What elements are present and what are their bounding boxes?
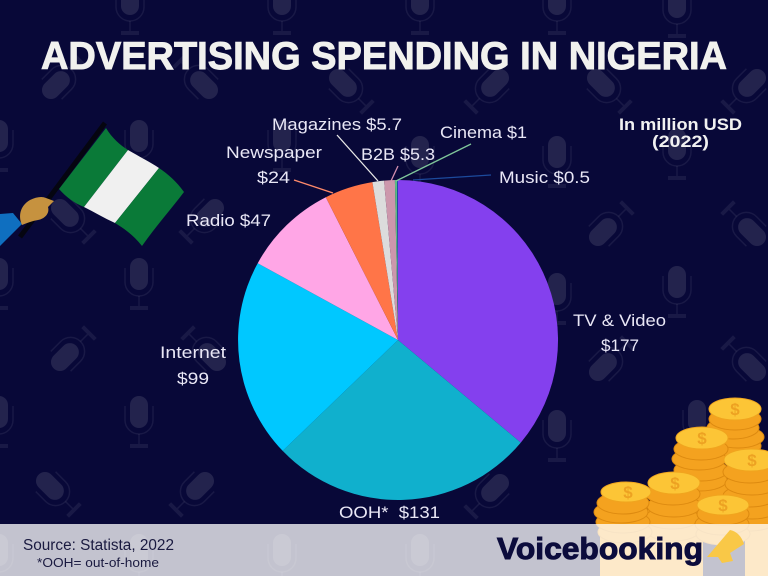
slice: OOH bbox=[283, 340, 521, 500]
logo: Voicebooking: Voicebooking bbox=[497, 531, 703, 566]
unit note: (2022) bbox=[652, 133, 709, 151]
pie labels: Cinema $1 bbox=[440, 123, 527, 142]
pie labels: Newspaper bbox=[226, 143, 322, 162]
title: ADVERTISING SPENDING IN NIGERIA bbox=[41, 35, 727, 78]
footer bar bbox=[0, 524, 768, 576]
unit note bbox=[619, 116, 742, 151]
pie labels: Music $0.5 bbox=[499, 168, 590, 187]
unit note: In million USD bbox=[619, 116, 742, 134]
slice: B2B bbox=[384, 180, 398, 340]
pie labels bbox=[160, 115, 666, 522]
source note bbox=[23, 537, 174, 570]
slice: TV & Video bbox=[398, 180, 558, 443]
icon: hand holding Nigerian flag bbox=[0, 123, 184, 246]
leader lines bbox=[294, 135, 491, 193]
slice: Music bbox=[397, 180, 398, 340]
pie labels: Internet bbox=[160, 343, 226, 362]
icon: coin stacks: $ bbox=[623, 483, 633, 502]
slice: Magazines bbox=[372, 181, 398, 340]
slice: Cinema bbox=[395, 180, 398, 340]
slice: Internet bbox=[238, 263, 398, 451]
pie labels: Magazines $5.7 bbox=[272, 115, 402, 134]
pie labels: Radio $47 bbox=[186, 211, 271, 230]
icon: coin stacks bbox=[594, 398, 768, 576]
icon: coin stacks: $ bbox=[697, 429, 707, 448]
icon: coin stacks: $ bbox=[670, 474, 680, 493]
pie labels: OOH* $131 bbox=[339, 503, 440, 522]
pie chart bbox=[238, 180, 558, 500]
icon: coin stacks: $ bbox=[730, 400, 740, 419]
pie labels: $24 bbox=[257, 168, 290, 187]
pie labels: TV & Video bbox=[573, 311, 666, 330]
slice: Radio bbox=[258, 197, 398, 340]
source note: Source: Statista, 2022 bbox=[23, 537, 174, 554]
pie labels: $99 bbox=[177, 369, 209, 388]
pie labels: B2B $5.3 bbox=[361, 145, 435, 164]
slice: Newspaper bbox=[326, 182, 398, 340]
icon: megaphone bbox=[707, 530, 744, 563]
pie labels: $177 bbox=[601, 336, 639, 355]
icon: coin stacks: $ bbox=[718, 496, 728, 515]
source note: *OOH= out-of-home bbox=[37, 556, 159, 570]
icon: coin stacks: $ bbox=[747, 451, 757, 470]
